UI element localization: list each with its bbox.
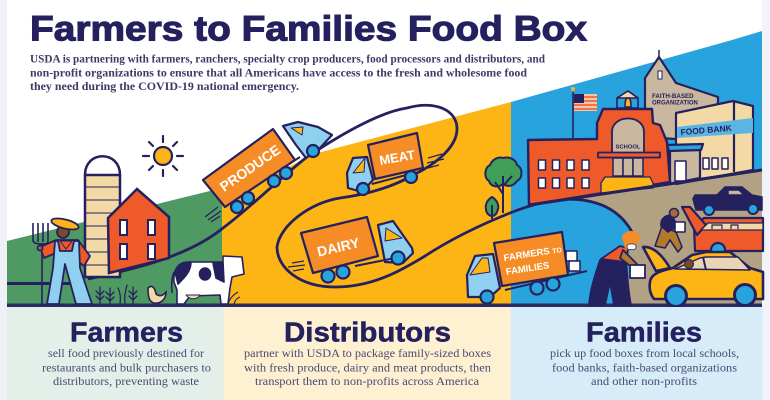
icon: silo <box>85 156 120 277</box>
text: families: and other non-profits <box>591 374 697 388</box>
food boxes on truck <box>566 251 580 271</box>
icon: cow <box>172 256 244 304</box>
text: families: pick up food boxes from local schools, <box>550 346 739 360</box>
text: farmers <box>42 346 211 388</box>
person: carrying box <box>655 208 685 252</box>
truck label: produce: PRODUCE <box>217 141 283 195</box>
heading: distributors: Distributors <box>284 316 451 348</box>
heading: families: Families <box>586 316 702 348</box>
car: orange hatchback <box>682 207 763 257</box>
background: tan parking lot <box>570 170 762 305</box>
icon: chicken <box>148 286 166 303</box>
icon: farmer with pitchfork <box>33 216 92 305</box>
speed lines: meat <box>427 154 444 168</box>
text: distributors: transport them to non-profits across America <box>255 374 480 388</box>
speed lines: dairy <box>288 261 305 271</box>
panel: farmers <box>7 307 224 400</box>
car: navy pickup <box>693 187 762 215</box>
truck: dairy <box>301 217 413 282</box>
icon: wheat and plants <box>96 285 137 304</box>
truck: meat <box>347 133 423 195</box>
truck label: dairy: DAIRY <box>315 234 362 260</box>
heading: farmers: Farmers <box>70 316 183 348</box>
intro text: they need during the COVID-19 national emergency. <box>30 79 299 93</box>
text: distributors: with fresh produce, dairy and meat products, then <box>244 360 491 374</box>
background: blue families sky <box>511 31 762 305</box>
building: faith-based organization: ORGANIZATION <box>652 100 698 106</box>
ground line <box>7 304 762 307</box>
flag <box>571 87 597 139</box>
truck: produce <box>203 122 332 213</box>
building: faith-based organization: FAITH-BASED <box>652 93 694 100</box>
background: yellow distributors hill <box>222 102 511 305</box>
text: families <box>550 346 739 388</box>
person: loading box <box>589 231 645 305</box>
truck label: farmers to families: FAMILIES <box>505 260 550 278</box>
intro text <box>30 52 545 93</box>
panel: families <box>510 307 762 400</box>
icon: red barn <box>108 189 169 273</box>
text: distributors: partner with USDA to package family-sized boxes <box>244 346 491 360</box>
building: school: SCHOOL <box>616 144 641 150</box>
panel: distributors <box>224 307 510 400</box>
school ground line <box>529 170 762 205</box>
icon: trees <box>485 157 522 219</box>
text: farmers: distributors, preventing waste <box>53 374 199 388</box>
building: faith-based organization <box>645 50 718 140</box>
fence rail <box>7 282 72 285</box>
building: food bank: FOOD BANK <box>680 123 733 137</box>
background: green farm hill <box>7 188 222 305</box>
school bell <box>617 91 638 108</box>
building: food bank <box>667 101 753 184</box>
text: farmers: sell food previously destined for <box>48 346 204 360</box>
text: distributors <box>244 346 491 388</box>
title: Farmers to Families Food Box <box>30 10 588 48</box>
truck label: farmers to families: FARMERS TO <box>503 246 562 264</box>
building: school <box>528 91 670 205</box>
winding road <box>88 105 632 287</box>
icon: grass tuft <box>228 292 240 304</box>
intro text: USDA is partnering with farmers, ranchers, specialty crop producers, food processors and distributors, and <box>30 52 545 66</box>
speed lines: produce <box>205 207 221 222</box>
car: yellow sedan <box>643 247 763 306</box>
text: farmers: restaurants and bulk purchasers to <box>42 360 211 374</box>
icon: sun <box>143 136 183 176</box>
truck: farmers to families <box>467 232 587 304</box>
truck label: meat: MEAT <box>378 147 416 168</box>
intro text: non-profit organizations to ensure that all Americans have access to the fresh and wholesome food <box>30 66 527 80</box>
text: families: food banks, faith-based organizations <box>552 360 737 374</box>
